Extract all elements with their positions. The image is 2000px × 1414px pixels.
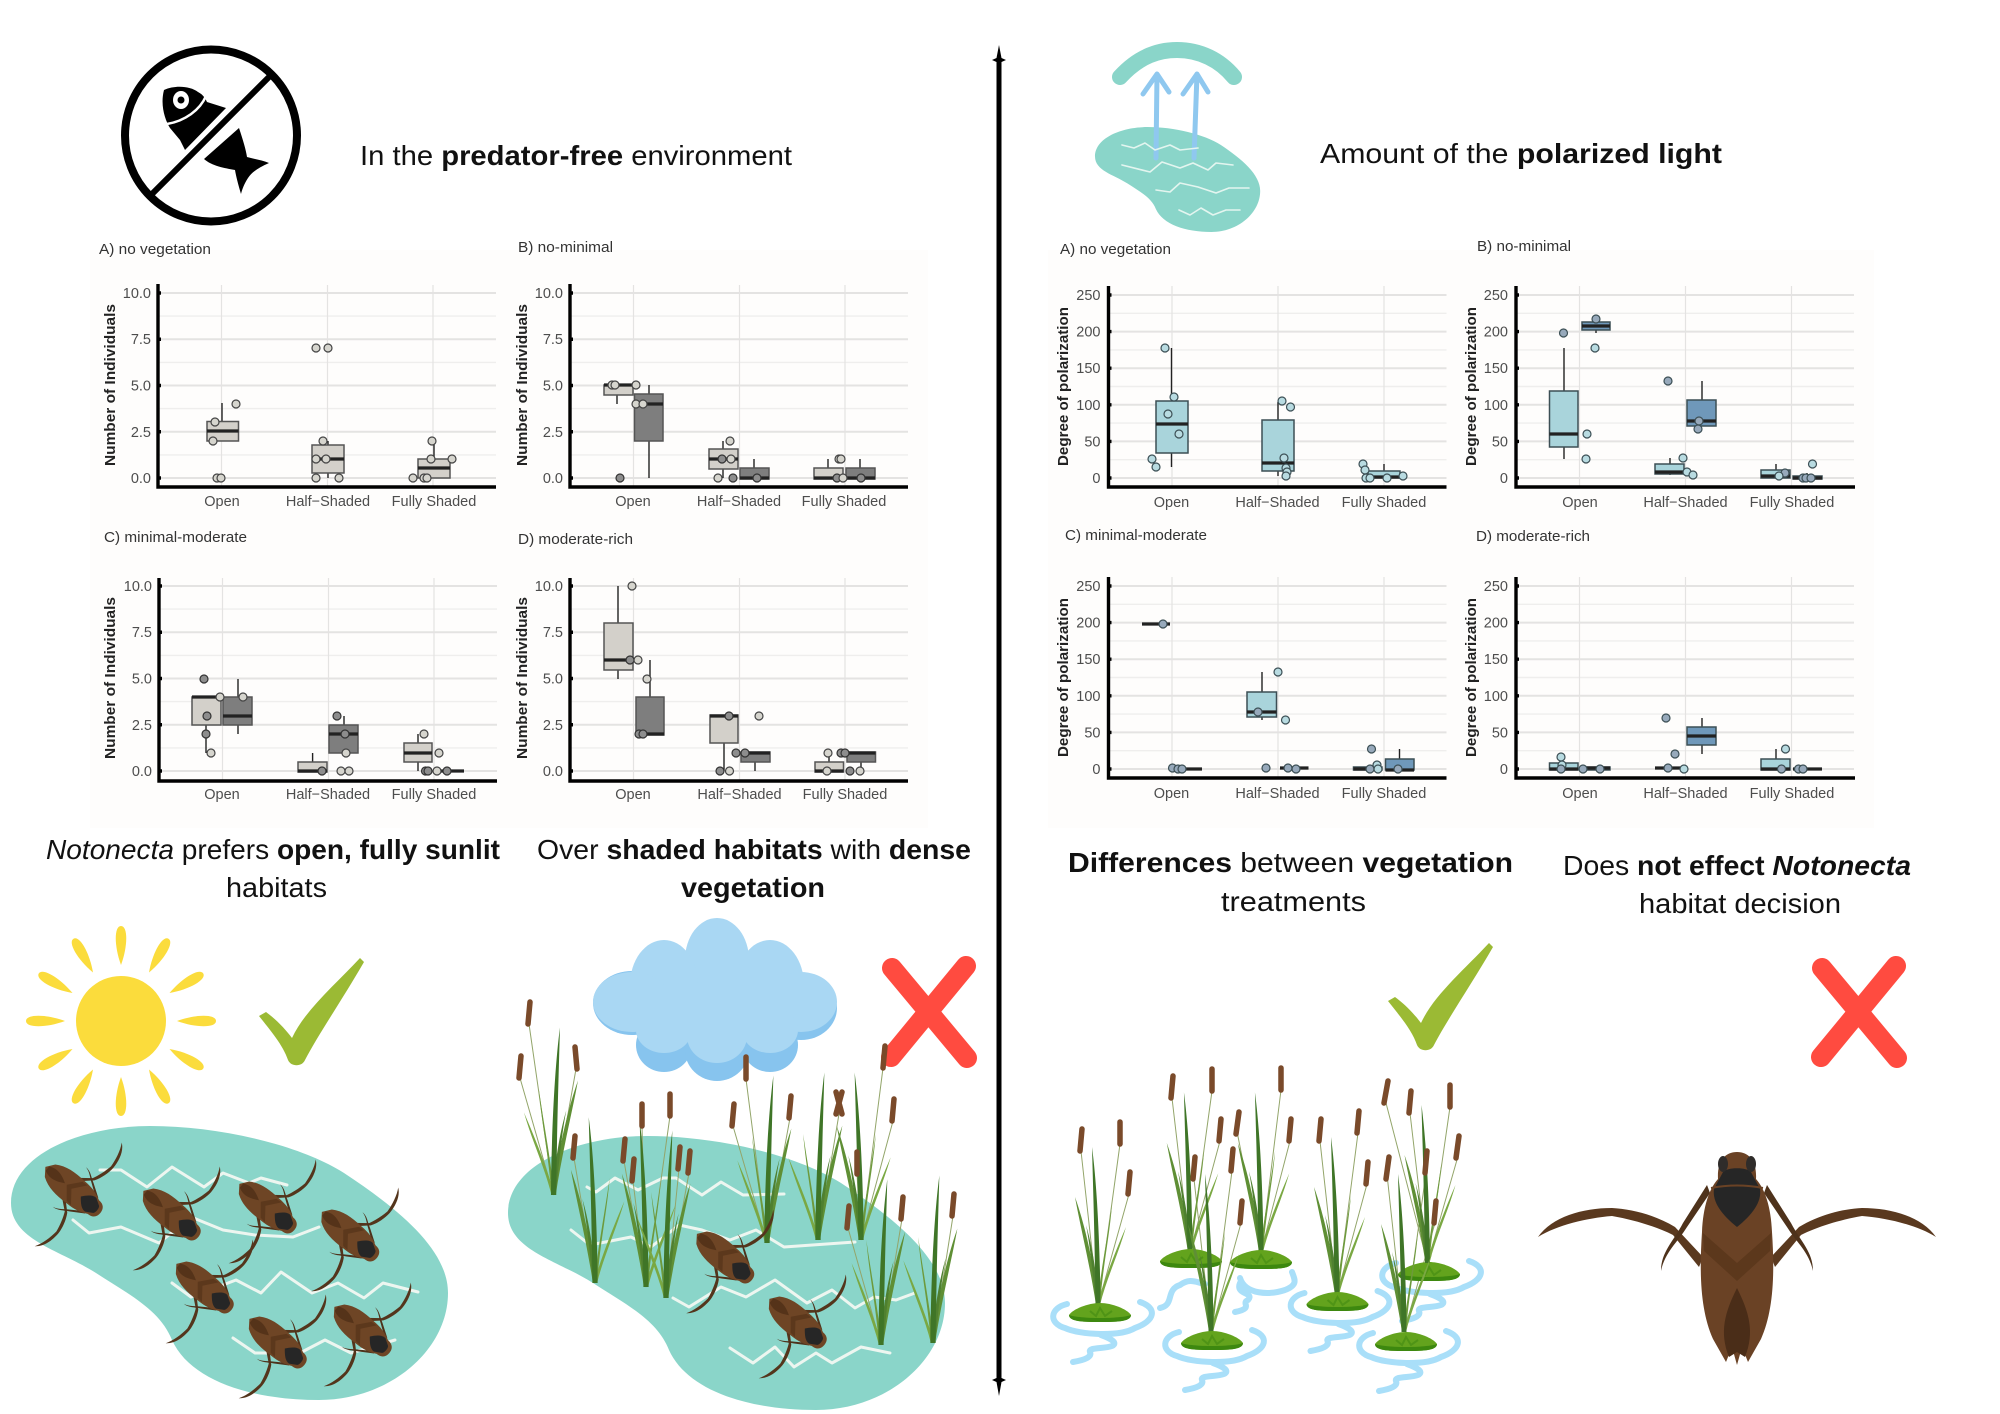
chart: individuals B no-minimal: 10.0 [535,286,563,302]
icon: green check (right) [1388,943,1493,1050]
chart: individuals C minimal-moderate [103,530,497,803]
reeds on mounds with water [1053,1068,1481,1391]
chart: polarization D moderate-rich: 50 [1492,725,1508,741]
icon: red cross (middle) [891,966,967,1058]
chart: polarization C minimal-moderate: Open [1154,786,1189,802]
chart: individuals A no vegetation: A) no vegetation [99,242,211,258]
chart: individuals A no vegetation: Fully Shaded [392,494,476,510]
icon: large water bug [1538,1152,1936,1365]
chart: polarization D moderate-rich: 150 [1484,652,1508,668]
caption: differences between treatments: Differences between vegetation [1068,847,1513,878]
chart: individuals C minimal-moderate: 2.5 [132,718,152,734]
chart: individuals C minimal-moderate: Number of Individuals [103,597,119,759]
chart: individuals A no vegetation: 7.5 [131,332,151,348]
caption: does not effect habitat decision: habitat decision [1639,888,1841,919]
caption: prefers open habitats: Notonecta prefers open, fully sunlit [46,834,500,865]
chart: individuals D moderate-rich: 0.0 [543,764,563,780]
chart: individuals D moderate-rich [515,532,908,803]
chart: polarization A no vegetation: 200 [1076,325,1100,341]
caption: over shaded habitats: Over shaded habitats with dense [537,834,971,865]
caption: prefers open habitats [46,834,500,903]
chart: polarization D moderate-rich: Fully Shaded [1750,786,1834,802]
chart: polarization A no vegetation: 250 [1076,288,1100,304]
chart: individuals D moderate-rich: Fully Shaded [803,787,887,803]
chart: polarization A no vegetation: Degree of polarization [1056,307,1072,466]
chart: individuals B no-minimal: 0.0 [543,471,563,487]
caption: over shaded habitats: vegetation [681,872,825,903]
chart: polarization C minimal-moderate: 250 [1076,579,1100,595]
chart: polarization D moderate-rich [1464,529,1855,802]
chart panel background: left [90,250,928,828]
chart: polarization B no-minimal: Half−Shaded [1643,495,1728,511]
chart: polarization A no vegetation [1056,242,1446,511]
chart: polarization A no vegetation: 100 [1076,398,1100,414]
chart: individuals C minimal-moderate: 10.0 [124,579,152,595]
chart: polarization B no-minimal: 200 [1484,325,1508,341]
chart: polarization C minimal-moderate: 50 [1084,725,1100,741]
chart: polarization D moderate-rich: 250 [1484,579,1508,595]
chart: individuals A no vegetation: 0.0 [131,471,151,487]
chart: individuals C minimal-moderate: 5.0 [132,672,152,688]
chart: individuals C minimal-moderate: Half−Shaded [286,787,370,803]
caption: does not effect habitat decision: Does not effect Notonecta [1563,850,1911,881]
icon: cloud [593,918,837,1081]
chart: individuals A no vegetation: 5.0 [131,378,151,394]
chart: individuals D moderate-rich: Number of Individuals [515,597,531,759]
chart: polarization D moderate-rich: D) moderate-rich [1476,529,1590,545]
chart: polarization B no-minimal: 100 [1484,398,1508,414]
chart: polarization B no-minimal: Fully Shaded [1750,495,1834,511]
chart panel background: right [1048,250,1874,828]
chart: polarization D moderate-rich: 200 [1484,616,1508,632]
pond with reeds and two bugs (shaded habitat) [508,1002,957,1410]
chart: polarization C minimal-moderate: 100 [1076,689,1100,705]
chart: individuals B no-minimal: Number of Individuals [515,304,531,466]
chart: individuals A no vegetation: 2.5 [131,425,151,441]
chart: polarization C minimal-moderate: 200 [1076,616,1100,632]
chart: polarization A no vegetation: 0 [1092,471,1100,487]
chart: polarization B no-minimal: B) no-minimal [1477,239,1571,255]
chart: polarization C minimal-moderate: Degree of polarization [1056,598,1072,757]
chart: individuals A no vegetation: Half−Shaded [286,494,370,510]
chart: individuals B no-minimal [515,240,908,510]
chart: polarization D moderate-rich: Half−Shaded [1643,786,1728,802]
chart: individuals D moderate-rich: Open [615,787,651,803]
chart: polarization B no-minimal [1464,239,1855,511]
caption: over shaded habitats [537,834,971,903]
chart: polarization C minimal-moderate: Half−Shaded [1235,786,1320,802]
caption: differences between treatments [1068,847,1513,917]
caption: prefers open habitats: habitats [226,872,327,903]
chart: polarization A no vegetation: A) no vegetation [1060,242,1171,258]
chart: individuals A no vegetation: Number of Individuals [103,304,119,466]
chart: individuals C minimal-moderate: 0.0 [132,764,152,780]
chart: polarization B no-minimal: 0 [1500,471,1508,487]
chart: polarization A no vegetation: 50 [1084,434,1100,450]
heading: predator-free: In the predator-free environment [360,140,792,171]
heading: polarized light: Amount of the polarized light [1320,138,1722,169]
chart: polarization C minimal-moderate [1056,528,1446,802]
chart: polarization D moderate-rich: 0 [1500,762,1508,778]
caption: differences between treatments: treatments [1221,886,1366,917]
icon: no fish [125,50,297,222]
chart: polarization A no vegetation: Half−Shaded [1235,495,1320,511]
chart: individuals B no-minimal: Half−Shaded [697,494,781,510]
chart: individuals B no-minimal: Fully Shaded [802,494,886,510]
chart: polarization C minimal-moderate: Fully Shaded [1342,786,1426,802]
chart: polarization B no-minimal: 150 [1484,361,1508,377]
chart: individuals C minimal-moderate: 7.5 [132,625,152,641]
chart: individuals B no-minimal: B) no-minimal [518,240,613,256]
chart: individuals A no vegetation: 10.0 [123,286,151,302]
pond with many bugs (open habitat) [2,1115,448,1414]
caption: does not effect habitat decision [1563,850,1911,919]
chart: polarization A no vegetation: 150 [1076,361,1100,377]
chart: polarization B no-minimal: 250 [1484,288,1508,304]
chart: individuals D moderate-rich: 2.5 [543,718,563,734]
chart: polarization A no vegetation: Fully Shaded [1342,495,1426,511]
icon: sun [26,926,216,1116]
chart: polarization D moderate-rich: Degree of polarization [1464,598,1480,757]
divider line between the two sections [992,45,1006,1396]
chart: individuals A no vegetation [99,242,496,510]
icon: red cross (right) [1821,966,1897,1058]
chart: polarization C minimal-moderate: C) minimal-moderate [1065,528,1207,544]
chart: individuals C minimal-moderate: Open [204,787,240,803]
chart: polarization B no-minimal: 50 [1492,434,1508,450]
chart: polarization A no vegetation: Open [1154,495,1189,511]
chart: individuals B no-minimal: 7.5 [543,332,563,348]
chart: individuals A no vegetation: Open [204,494,240,510]
chart: individuals D moderate-rich: 5.0 [543,672,563,688]
chart: individuals B no-minimal: Open [615,494,651,510]
chart: individuals D moderate-rich: 7.5 [543,625,563,641]
chart: individuals C minimal-moderate: Fully Shaded [392,787,476,803]
chart: individuals C minimal-moderate: C) minimal-moderate [104,530,247,546]
chart: individuals B no-minimal: 5.0 [543,378,563,394]
icon: polarized light from pond [1095,50,1260,232]
chart: polarization B no-minimal: Open [1562,495,1598,511]
chart: polarization C minimal-moderate: 150 [1076,652,1100,668]
chart: polarization C minimal-moderate: 0 [1092,762,1100,778]
chart: individuals D moderate-rich: 10.0 [535,579,563,595]
chart: individuals D moderate-rich: D) moderate-rich [518,532,633,548]
chart: polarization B no-minimal: Degree of polarization [1464,307,1480,466]
chart: polarization D moderate-rich: Open [1562,786,1598,802]
chart: polarization D moderate-rich: 100 [1484,689,1508,705]
icon: green check (left) [259,958,364,1065]
chart: individuals D moderate-rich: Half−Shaded [697,787,782,803]
chart: individuals B no-minimal: 2.5 [543,425,563,441]
